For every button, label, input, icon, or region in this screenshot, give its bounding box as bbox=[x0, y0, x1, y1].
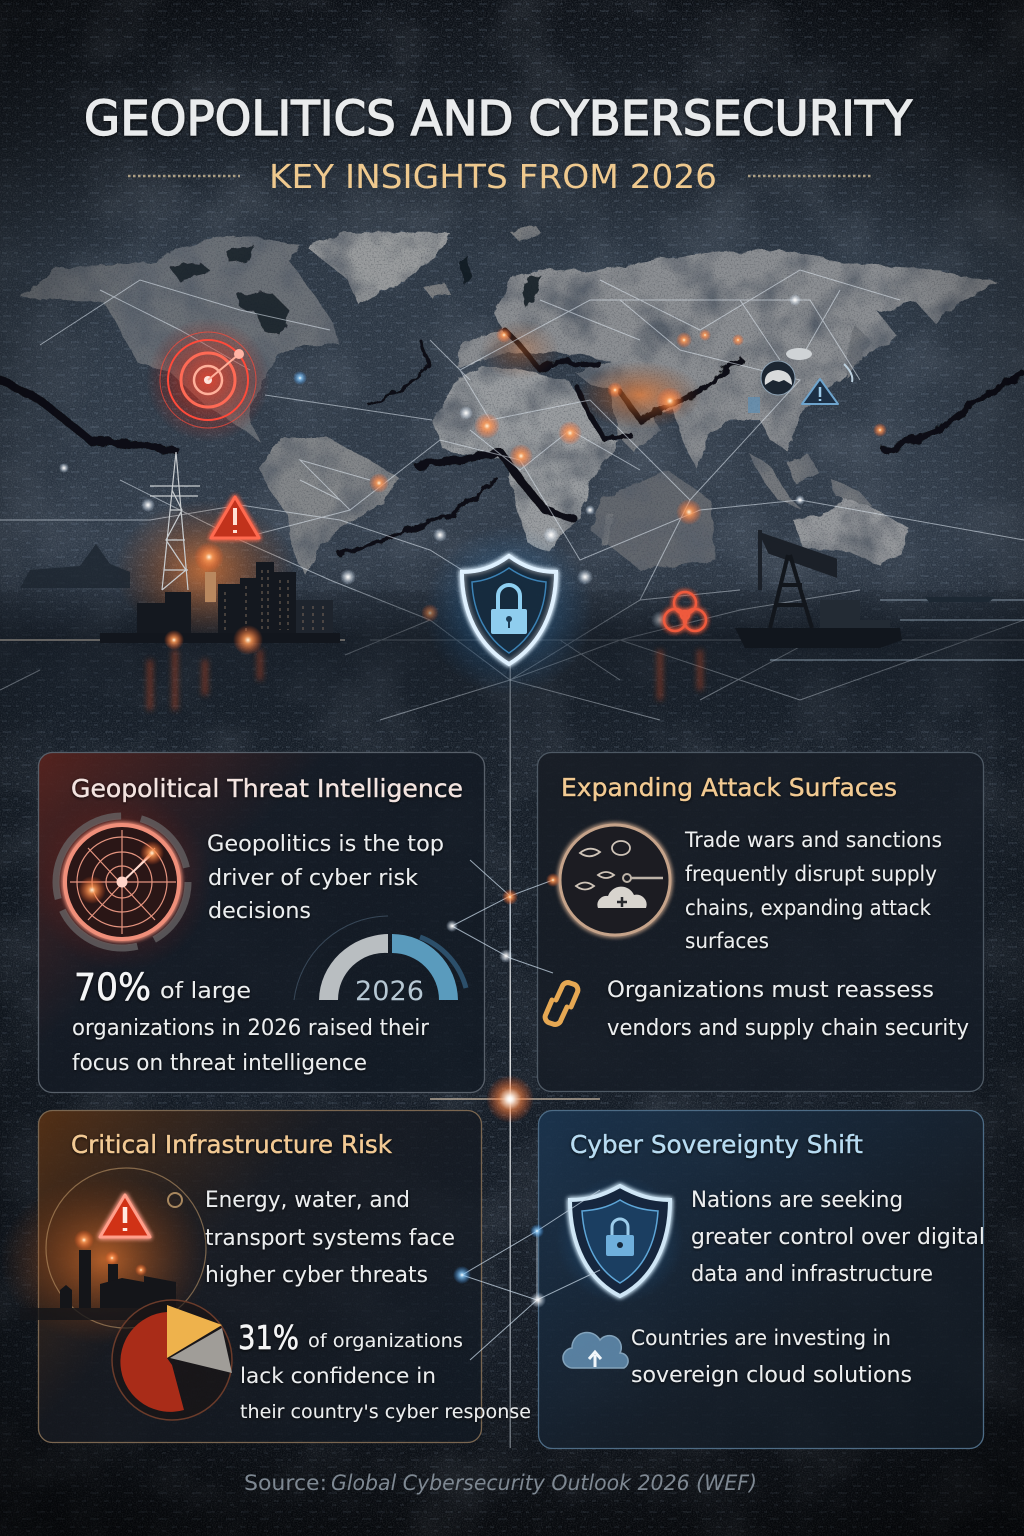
gauge 2026 bbox=[294, 916, 466, 1007]
body text bbox=[205, 1188, 455, 1288]
body text: sovereign cloud: Countries are investing in bbox=[631, 1326, 891, 1350]
map glow nodes bbox=[59, 294, 887, 629]
icon: central shield with padlock bbox=[424, 525, 594, 695]
statistic 70%: 70% bbox=[74, 966, 151, 1009]
statistic 31%: lack confidence in bbox=[240, 1364, 436, 1388]
connector network between panels bbox=[430, 662, 600, 1448]
body text: Geopolitics is the top bbox=[207, 832, 444, 857]
network lines bbox=[0, 270, 1024, 720]
body text bbox=[207, 832, 444, 924]
bright horizon line bbox=[0, 639, 345, 641]
panel: cyber sovereignty shift bbox=[538, 1110, 985, 1448]
icon: threats cluster on map bbox=[748, 348, 852, 413]
rifts and inland seas bbox=[0, 246, 1024, 555]
oil pump rig bbox=[735, 530, 995, 648]
heading: Critical Infrastructure Risk bbox=[71, 1130, 393, 1159]
world map bbox=[0, 226, 1024, 575]
body text: vendors: vendors and supply chain security bbox=[607, 1016, 969, 1041]
orange heat over regions bbox=[578, 361, 702, 429]
body text: Nations are seeking bbox=[691, 1188, 903, 1213]
statistic 31%: their country's cyber response bbox=[240, 1401, 531, 1423]
heading: Cyber Sovereignty Shift bbox=[570, 1130, 863, 1159]
pie chart bbox=[112, 1300, 232, 1420]
panel: expanding attack surfaces bbox=[538, 752, 984, 1092]
continents bbox=[20, 226, 999, 575]
icon: supply chain circle bbox=[560, 825, 670, 935]
icon: cloud bbox=[563, 1332, 628, 1368]
statistic 70%: focus on threat intelligence bbox=[72, 1051, 367, 1076]
source line: Global Cybersecurity Outlook 2026 (WEF) bbox=[331, 1471, 757, 1495]
body text: vendors bbox=[607, 978, 969, 1041]
heading: Expanding Attack Surfaces bbox=[561, 773, 897, 802]
panel: geopolitical threat intelligence bbox=[32, 752, 484, 1092]
body text: frequently disrupt supply bbox=[685, 862, 937, 886]
body text: higher cyber threats bbox=[205, 1263, 428, 1288]
statistic 70%: of large bbox=[160, 979, 251, 1004]
icon: blue shield bbox=[556, 1176, 684, 1304]
icon: biohazard bbox=[664, 592, 706, 631]
icon: radar bbox=[32, 792, 212, 972]
body text: Trade wars and sanctions bbox=[684, 828, 942, 852]
body text: decisions bbox=[208, 899, 311, 924]
body text: greater control over digital bbox=[691, 1225, 985, 1250]
body text: sovereign cloud: sovereign cloud solutions bbox=[631, 1363, 912, 1388]
body text: surfaces bbox=[685, 929, 769, 953]
body text: chains, expanding attack bbox=[685, 896, 932, 920]
icon: red warning triangle bbox=[211, 497, 259, 538]
statistic 70% bbox=[72, 966, 430, 1076]
body text: sovereign cloud bbox=[631, 1326, 912, 1388]
body text: Energy, water, and bbox=[205, 1188, 410, 1213]
gauge 2026: 2026 bbox=[355, 976, 424, 1007]
icon: red radar on map bbox=[146, 318, 270, 442]
body text: driver of cyber risk bbox=[208, 866, 418, 891]
statistic 31%: of organizations bbox=[308, 1330, 463, 1352]
subtitle: KEY INSIGHTS FROM 2026 bbox=[269, 157, 717, 196]
body text: transport systems face bbox=[205, 1226, 455, 1251]
icon: industrial skyline with warning bbox=[0, 1168, 210, 1345]
source line: Source: bbox=[244, 1471, 327, 1495]
panel: critical infrastructure risk bbox=[0, 1110, 531, 1442]
heading: Geopolitical Threat Intelligence bbox=[71, 774, 463, 803]
body text bbox=[684, 828, 942, 953]
left skyline with tower bbox=[20, 452, 340, 655]
icon: chain link bbox=[545, 983, 578, 1024]
statistic 70%: organizations in 2026 raised their bbox=[72, 1016, 430, 1041]
water and harbour reflections bbox=[0, 590, 1024, 750]
statistic 31% bbox=[238, 1318, 531, 1423]
statistic 31%: 31% bbox=[238, 1318, 299, 1357]
body text bbox=[691, 1188, 985, 1287]
title: GEOPOLITICS AND CYBERSECURITY bbox=[84, 91, 913, 147]
body text: data and infrastructure bbox=[691, 1262, 933, 1287]
body text: vendors: Organizations must reassess bbox=[607, 978, 934, 1003]
